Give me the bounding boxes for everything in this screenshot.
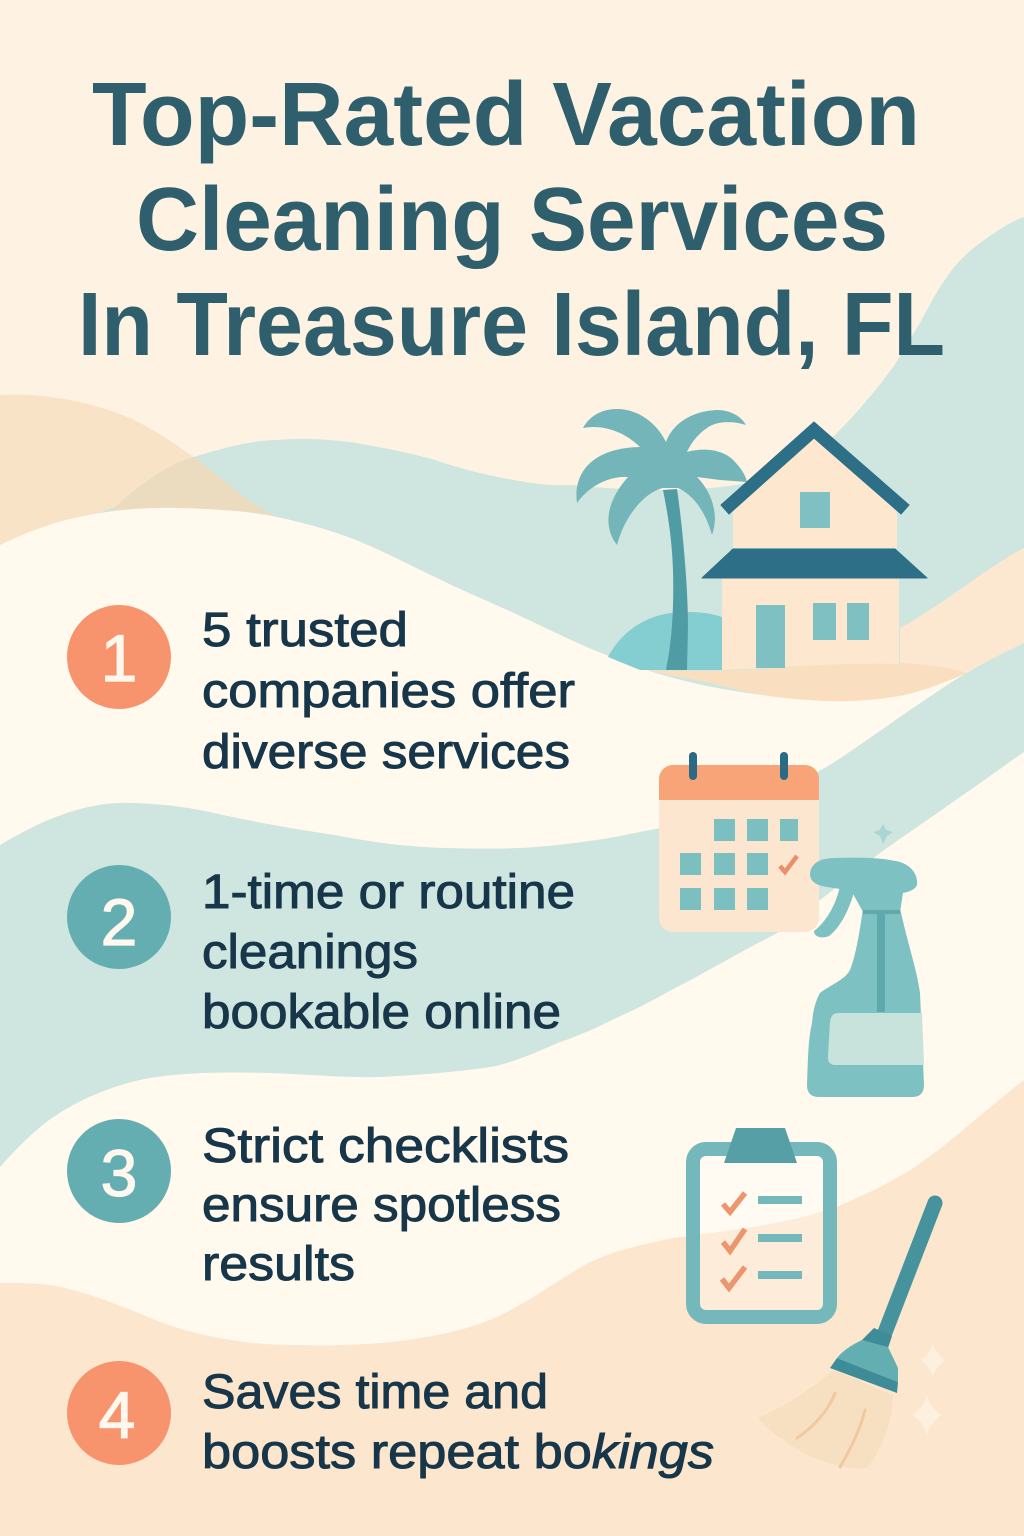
calendar header xyxy=(659,765,819,800)
icon: palm tree and beach house xyxy=(576,409,967,701)
icon: clipboard checklist xyxy=(693,1128,830,1317)
lower roof xyxy=(702,549,927,578)
number badge 3: 3 xyxy=(101,1136,137,1210)
step 4 text: boosts repeat bo kings xyxy=(202,1425,714,1479)
step 3 xyxy=(67,1119,569,1291)
number badge 4: 4 xyxy=(99,1378,135,1452)
check marks xyxy=(722,1193,745,1288)
number badge 4 xyxy=(67,1361,171,1465)
icon: broom xyxy=(758,1203,935,1468)
title xyxy=(78,65,945,375)
spray trigger xyxy=(814,886,854,937)
upper wall xyxy=(733,436,897,548)
calendar rings xyxy=(689,752,697,780)
step 4 xyxy=(67,1361,714,1479)
palm fronds xyxy=(576,409,747,545)
broom bristles xyxy=(758,1370,893,1468)
step 3 text: Strict checklists xyxy=(202,1119,569,1173)
step 1 text: 5 trusted xyxy=(202,603,408,657)
title: Top-Rated Vacation xyxy=(92,65,920,165)
bristle lines xyxy=(797,1393,865,1467)
step 4 text: Saves time and xyxy=(202,1365,548,1419)
title: In Treasure Island, FL xyxy=(78,275,945,375)
number badge 1: 1 xyxy=(101,621,137,695)
step 3 text: results xyxy=(202,1237,355,1291)
calendar check mark xyxy=(780,856,797,872)
step 2 text: bookable online xyxy=(202,985,561,1039)
door xyxy=(756,605,785,668)
icon: small sparkle xyxy=(873,824,893,844)
broom collar xyxy=(862,1328,892,1348)
calendar day grid xyxy=(680,819,798,910)
title: Cleaning Services xyxy=(136,170,888,270)
number badge 2 xyxy=(67,865,171,969)
number badge 3 xyxy=(67,1119,171,1223)
broom ferrule xyxy=(837,1340,898,1382)
step 1 xyxy=(67,603,575,779)
sand ground xyxy=(647,662,967,701)
step 2 text: cleanings xyxy=(202,925,418,979)
icon: calendar xyxy=(659,752,819,932)
step 1 text xyxy=(202,603,575,779)
lower wall xyxy=(722,578,899,670)
step 3 text xyxy=(202,1119,569,1291)
step 4 text xyxy=(202,1365,714,1479)
step 1 text: companies offer xyxy=(202,664,575,718)
step 2 text: 1-time or routine xyxy=(202,865,575,919)
icon: sparkles xyxy=(912,1344,946,1435)
checklist lines xyxy=(758,1196,802,1279)
bottle label xyxy=(828,1013,924,1065)
step 3 text: ensure spotless xyxy=(202,1178,561,1232)
number badge 2: 2 xyxy=(101,885,137,959)
step 2 text xyxy=(202,865,575,1039)
island mound xyxy=(608,612,724,670)
windows xyxy=(813,603,836,640)
palm trunk xyxy=(663,489,688,670)
number badge 1 xyxy=(67,605,171,709)
icon: spray bottle xyxy=(807,858,924,1097)
bottle tube xyxy=(863,910,900,1012)
step 2 xyxy=(67,865,575,1039)
broom band xyxy=(830,1358,898,1393)
attic window xyxy=(800,492,830,528)
step 1 text: diverse services xyxy=(202,725,570,779)
roof xyxy=(721,422,909,514)
spray head xyxy=(810,858,917,912)
clipboard clip xyxy=(724,1128,797,1163)
broom handle xyxy=(884,1203,935,1335)
bottle body xyxy=(807,908,924,1097)
